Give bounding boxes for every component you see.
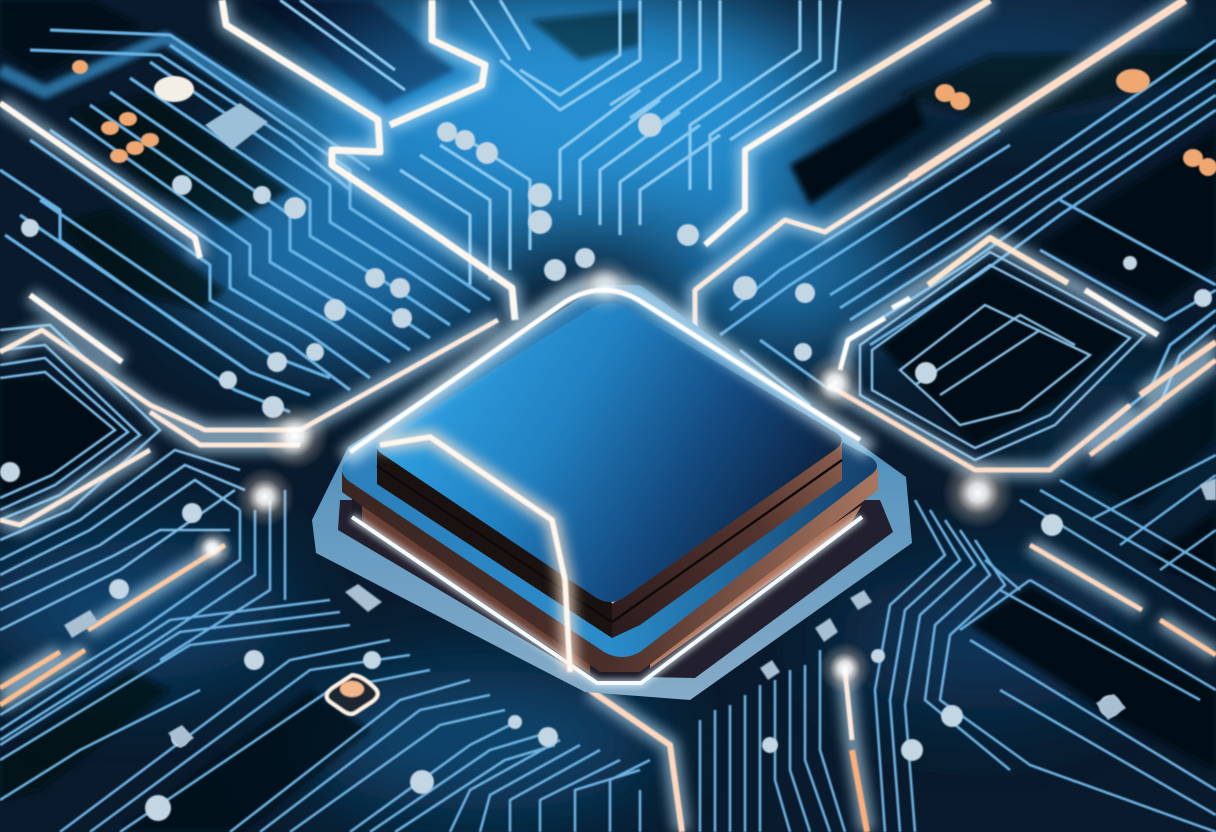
small surface-mount components xyxy=(64,478,1216,748)
package: chip top face xyxy=(376,303,842,602)
component: lit pad xyxy=(154,76,194,102)
traces: top centre family xyxy=(280,0,840,285)
light flares xyxy=(192,255,1014,694)
copper contacts xyxy=(72,60,1216,176)
microchip package xyxy=(312,285,912,700)
traces: upper left family xyxy=(0,30,490,412)
package: lower substrate shadow xyxy=(338,500,893,678)
traces: upper right family xyxy=(720,40,1216,440)
package: light streak across chip xyxy=(380,437,570,672)
top left component cluster xyxy=(154,76,268,150)
package: under-plate recess xyxy=(352,480,862,683)
package: base plate xyxy=(342,442,878,672)
trace: wide blue bus top left xyxy=(0,38,325,140)
package: top edge glow xyxy=(345,285,870,458)
traces: lower left family xyxy=(0,490,650,832)
component: small chip xyxy=(205,103,268,150)
traces: right panel concentric loops xyxy=(860,252,1145,460)
package: substrate xyxy=(312,285,912,700)
traces: left panel concentric loops xyxy=(0,325,245,630)
component: glowing ring pad xyxy=(326,675,378,714)
traces: lower right family xyxy=(700,455,1216,832)
package: chip side walls xyxy=(377,440,842,638)
